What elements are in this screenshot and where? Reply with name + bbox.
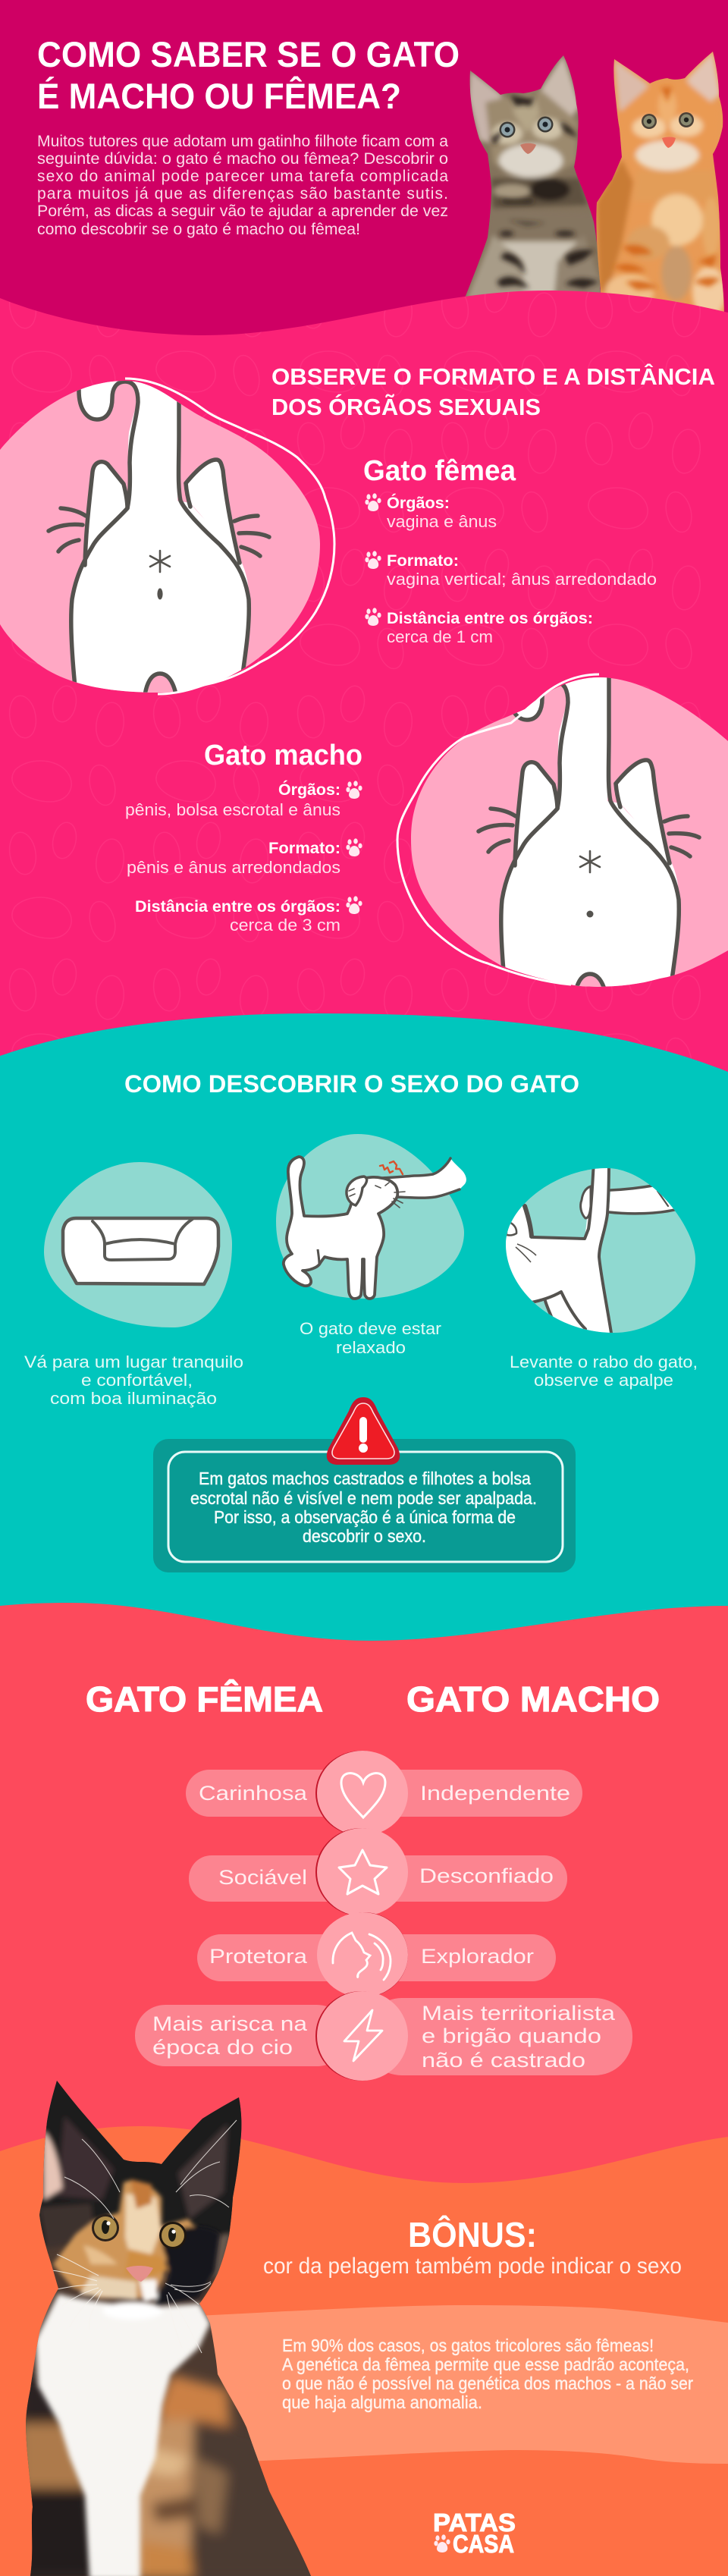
step captions: observe e apalpe (534, 1371, 673, 1390)
comparison row 2: Sociável (218, 1866, 307, 1889)
text block: gato macho: Distância entre os órgãos: (135, 898, 340, 916)
photo: calico kitten (15, 2071, 322, 2576)
panel: light orange band (197, 2305, 728, 2464)
text block: gato fêmea: Gato fêmea (363, 455, 516, 487)
illustration: lifting the tail (506, 1168, 695, 1333)
text block: gato macho (125, 740, 362, 935)
callout: warning panel: descobrir o sexo. (303, 1526, 426, 1546)
heading: bônus: cor da pelagem também pode indicar o sexo (263, 2254, 682, 2279)
text block: gato fêmea: vagina vertical; ânus arredondado (387, 570, 657, 589)
comparison row 4: não é castrado (422, 2049, 585, 2072)
ears and dark head (38, 2071, 250, 2279)
logo: patas da casa (433, 2508, 516, 2558)
intro text block: como descobrir se o gato é macho ou fêmea! (37, 221, 360, 238)
text block: gato fêmea: Formato: (387, 552, 459, 570)
comparison row 3: Protetora (209, 1945, 308, 1968)
illustration: cat bed (44, 1162, 232, 1327)
comparison row 2: Desconfiado (419, 1864, 554, 1887)
comparison row 3 (197, 1912, 556, 1997)
text block: gato macho: Gato macho (204, 740, 362, 771)
text block: gato fêmea (363, 455, 657, 646)
callout: warning panel: escrotal não é visível e nem pode ser apalpada. (190, 1488, 537, 1508)
step captions: com boa iluminação (50, 1389, 217, 1408)
callout: warning panel: Em gatos machos castrados e filhotes a bolsa (199, 1469, 531, 1488)
title (37, 34, 460, 116)
paw icon 1 (346, 781, 362, 799)
eyes (92, 2214, 119, 2241)
heading: bônus: BÔNUS: (408, 2215, 537, 2254)
icon: warning triangle (327, 1397, 400, 1465)
eye (507, 1221, 516, 1236)
step captions: e confortável, (81, 1371, 193, 1390)
photo: tabby kitten (466, 55, 601, 297)
face colour patches (53, 2179, 220, 2306)
text block: bonus explanation: A genética da fêmea permite que esse padrão aconteça, (282, 2355, 689, 2374)
icon: lightning (344, 2010, 382, 2061)
illustration: female cat blob (0, 364, 334, 702)
chest and body (19, 2374, 322, 2576)
text block: gato fêmea: Órgãos: (387, 494, 450, 512)
comparison row 4 (135, 1991, 632, 2081)
heading: observe: OBSERVE O FORMATO E A DISTÂNCIA (271, 363, 715, 390)
title: É MACHO OU FÊMEA? (37, 76, 401, 116)
paw icon 3 (365, 608, 381, 626)
intro text block: para muitos já que as diferenças são bastante sutis. (37, 185, 448, 203)
paw icon 2 (365, 551, 381, 569)
text block: gato macho: cerca de 3 cm (230, 916, 340, 935)
text block: gato macho: pênis e ânus arredondados (127, 858, 340, 877)
comparison row 4: Mais territorialista (422, 2002, 616, 2025)
cat face details (349, 1183, 405, 1208)
heading: comparison titles: GATO MACHO (406, 1679, 660, 1719)
text block: gato macho: Órgãos: (278, 781, 340, 799)
step captions: Levante o rabo do gato, (510, 1352, 698, 1371)
step captions (24, 1319, 698, 1408)
step captions: O gato deve estar (300, 1319, 441, 1338)
paw icon 2 (346, 838, 362, 856)
heading: observe: DOS ÓRGÃOS SEXUAIS (271, 393, 541, 420)
photo: orange kitten (596, 52, 724, 312)
heading: como descobrir: COMO DESCOBRIR O SEXO DO GATO (124, 1070, 579, 1098)
icon: heart (341, 1773, 385, 1817)
comparison row 4: época do cio (152, 2036, 293, 2059)
heading: comparison titles (86, 1679, 660, 1719)
comparison row 4: e brigão quando (422, 2025, 601, 2047)
whiskers (52, 2120, 237, 2353)
text block: gato macho: Formato: (268, 840, 340, 857)
comparison row 2 (189, 1828, 567, 1916)
callout: warning panel (153, 1397, 576, 1572)
panel: orange section background (0, 2126, 728, 2576)
cat body (284, 1157, 397, 1299)
text block: gato macho: pênis, bolsa escrotal e ânus (125, 800, 340, 819)
icon: cat head with sound waves (333, 1933, 391, 1980)
intro text block: Porém, as dicas a seguir vão te ajudar a aprender de vez (37, 203, 448, 220)
heading: comparison titles: GATO FÊMEA (86, 1679, 323, 1719)
illustration: male cat blob (397, 664, 728, 1002)
body (506, 1168, 611, 1333)
icon: star (339, 1850, 387, 1894)
arm (382, 1158, 466, 1198)
intro text block: sexo do animal pode parecer uma tarefa complicada (37, 168, 448, 185)
illustration: petting cat (276, 1134, 466, 1299)
heading: observe (271, 363, 715, 420)
text block: bonus explanation: que haja alguma anomalia. (282, 2392, 482, 2412)
background: magenta header (0, 0, 728, 349)
logo: patas da casa: CASA (453, 2530, 514, 2558)
step captions: relaxado (336, 1338, 406, 1357)
step captions: Vá para um lugar tranquilo (24, 1352, 243, 1371)
logo: patas da casa: PATAS (433, 2508, 516, 2537)
title: COMO SABER SE O GATO (37, 34, 460, 74)
panel: teal section background (0, 1013, 728, 1669)
hand (347, 1176, 367, 1205)
comparison row 4: Mais arisca na (152, 2012, 308, 2035)
text block: gato fêmea: vagina e ânus (387, 512, 497, 531)
arm (609, 1186, 675, 1212)
icon: logo paw (434, 2534, 450, 2552)
paw icon 1 (365, 493, 381, 511)
text block: bonus explanation (282, 2336, 693, 2412)
comparison row 1 (186, 1751, 582, 1836)
intro text block (37, 133, 448, 238)
comparison row 1: Independente (420, 1782, 570, 1805)
nose (126, 2266, 153, 2282)
whiskers (516, 1244, 536, 1262)
text block: gato fêmea: Distância entre os órgãos: (387, 610, 593, 627)
hand (581, 1186, 591, 1218)
heading: bônus (263, 2215, 682, 2279)
text block: bonus explanation: o que não é possível na genética dos machos - a não ser (282, 2373, 693, 2393)
paw icon 3 (346, 896, 362, 914)
callout: warning panel: Por isso, a observação é a única forma de (214, 1507, 516, 1527)
text block: gato fêmea: cerca de 1 cm (387, 627, 493, 646)
comparison row 1: Carinhosa (199, 1782, 308, 1805)
icon: squiggle motion marks (380, 1161, 403, 1174)
text block: bonus explanation: Em 90% dos casos, os gatos tricolores são fêmeas! (282, 2336, 654, 2355)
panel: red section background (0, 1603, 728, 2200)
panel: pink section background (0, 291, 728, 1077)
intro text block: seguinte dúvida: o gato é macho ou fêmea? Descobrir o (37, 150, 448, 168)
comparison row 3: Explorador (421, 1945, 534, 1968)
intro text block: Muitos tutores que adotam um gatinho filhote ficam com a (37, 133, 448, 150)
